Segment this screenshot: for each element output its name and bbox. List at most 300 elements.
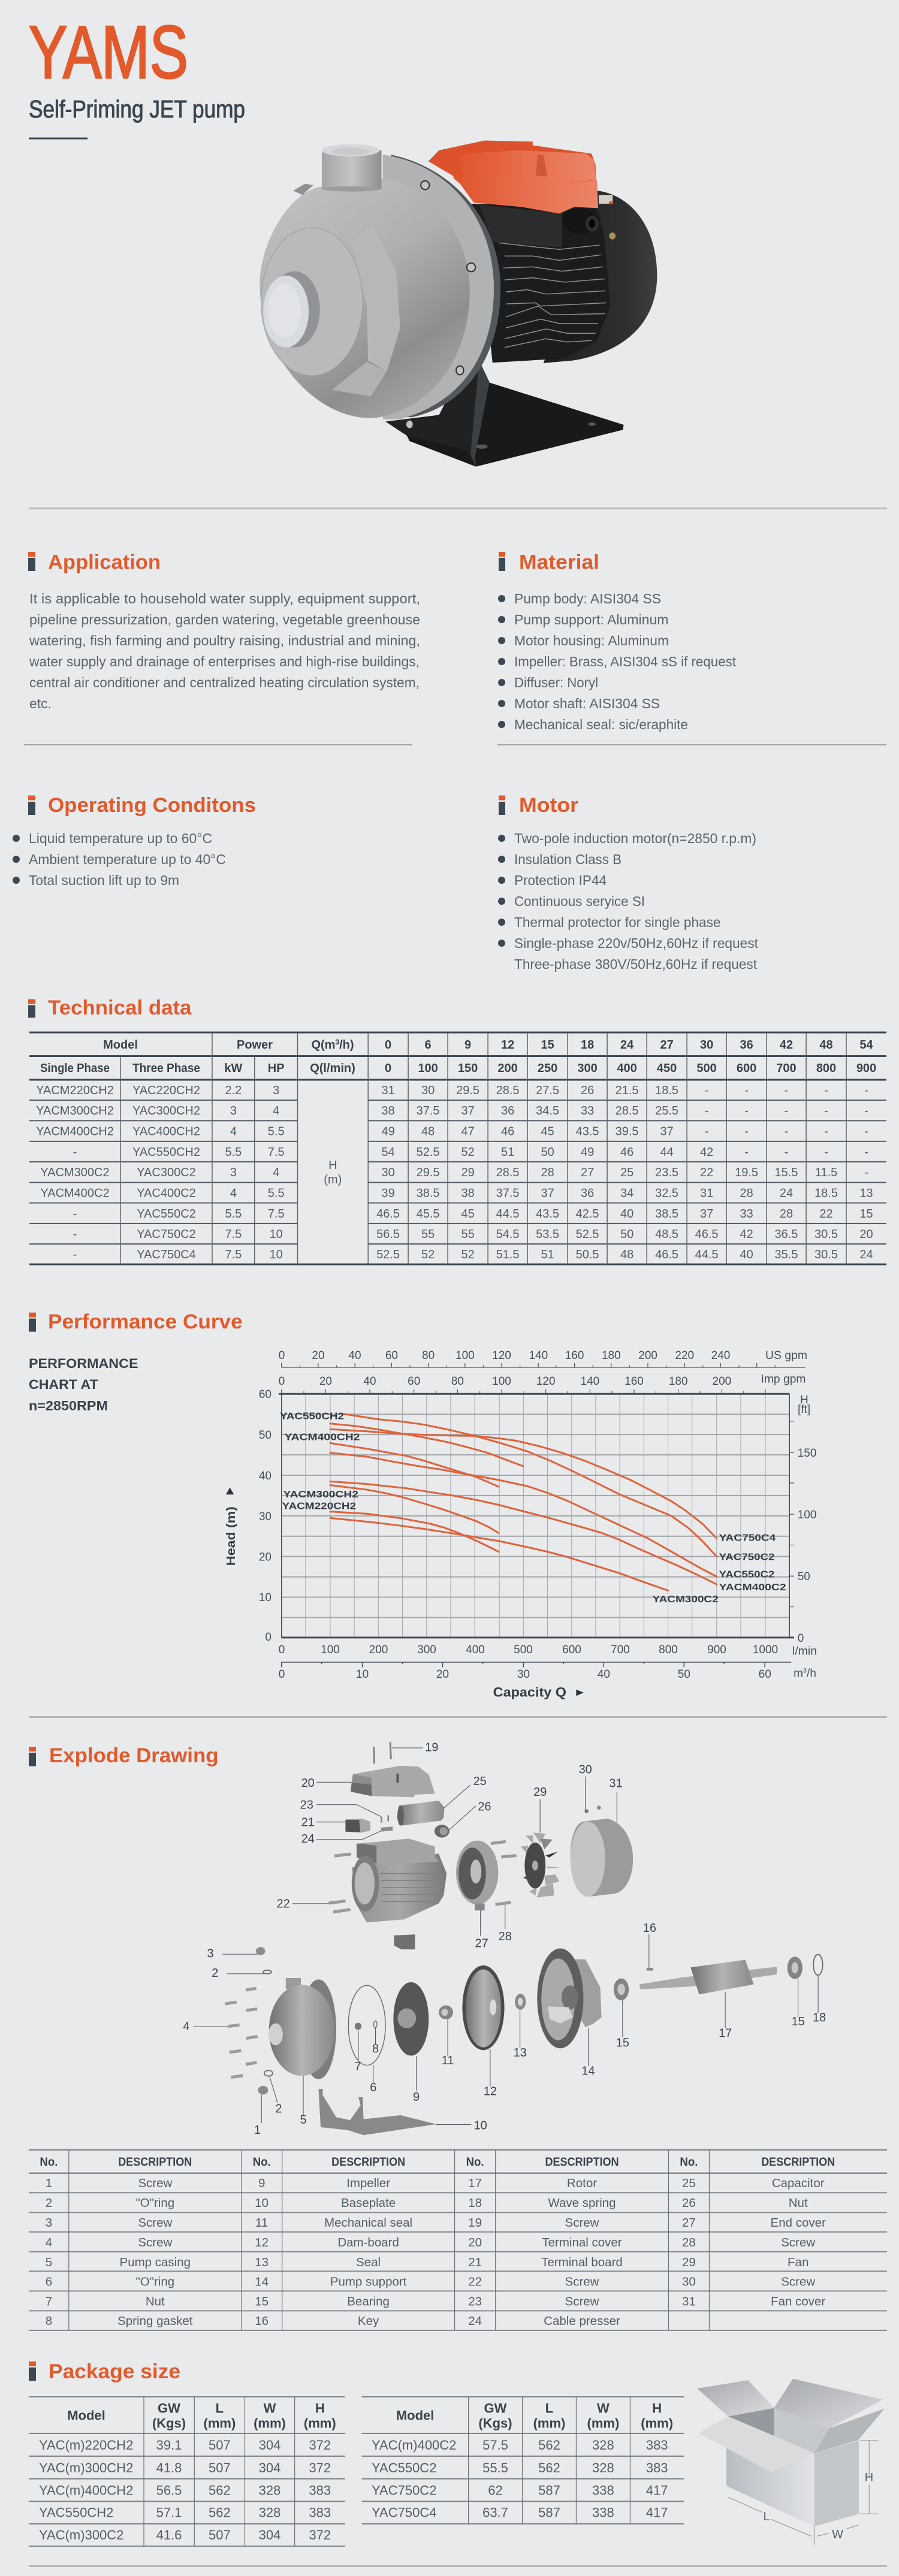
technical data table: YACM220CH2 (36, 1084, 114, 1097)
technical data table: 52 (421, 1248, 435, 1261)
Imp gpm axis labels: 180 (669, 1375, 688, 1388)
technical data table: 52 (461, 1248, 475, 1261)
motor list: Thermal protector for single phase (514, 914, 720, 930)
head axis labels: 0 (265, 1631, 271, 1644)
technical data table: 24 (620, 1038, 634, 1052)
parts table: Screw (781, 2275, 815, 2289)
package table right: L (545, 2401, 553, 2416)
part numbers: 14 (581, 2065, 595, 2078)
parts table: 30 (682, 2275, 696, 2289)
technical data table: 37.5 (417, 1104, 440, 1118)
technical data table: 3 (273, 1084, 279, 1097)
m3/h axis labels: 20 (436, 1668, 449, 1681)
technical data table: 54.5 (496, 1228, 520, 1241)
technical data table: 38 (381, 1104, 395, 1118)
technical data table: 52.5 (576, 1228, 599, 1241)
parts table: 16 (255, 2314, 269, 2328)
technical data table: Model (103, 1038, 138, 1052)
head axis labels (259, 1388, 271, 1644)
head axis labels: 30 (259, 1511, 271, 1523)
technical data table: - (824, 1125, 828, 1138)
part numbers: 17 (719, 2027, 732, 2040)
technical data table: 31 (381, 1084, 395, 1097)
curve labels: YACM300CH2 (283, 1490, 358, 1500)
parts table: Terminal cover (542, 2236, 622, 2249)
Imp gpm axis labels: 100 (492, 1375, 511, 1388)
parts table: 22 (468, 2275, 482, 2289)
technical data table: - (73, 1207, 77, 1221)
housing screws (329, 1841, 517, 1912)
technical data table: 28 (541, 1166, 554, 1179)
chart note: PERFORMANCE (29, 1356, 138, 1371)
package table left: 39.1 (156, 2438, 182, 2453)
parts table: Rotor (567, 2176, 597, 2190)
technical data table: - (73, 1228, 77, 1241)
parts table: 6 (46, 2275, 52, 2289)
technical data table: 800 (816, 1062, 836, 1075)
technical data table: 26 (581, 1084, 594, 1097)
parts table: 9 (258, 2176, 265, 2190)
feet axis labels: 100 (798, 1509, 816, 1521)
technical data table: 5.5 (268, 1125, 285, 1138)
l/min axis labels: 900 (707, 1644, 726, 1656)
part numbers: 29 (533, 1786, 547, 1799)
m3/h axis labels: 30 (517, 1668, 530, 1681)
technical data table: 12 (501, 1038, 514, 1052)
motor list: Three-phase 380V/50Hz,60Hz if request (514, 956, 758, 972)
technical data table: 18.5 (655, 1084, 678, 1097)
section marker (28, 552, 35, 571)
body text: central air conditioner and centralized heating circulation system, (29, 675, 420, 690)
heading: Operating Conditons (48, 794, 256, 817)
technical data table: 30 (700, 1038, 713, 1052)
m3/h axis labels: 40 (598, 1668, 610, 1681)
technical data table: YAC550C2 (137, 1207, 196, 1221)
panel: operating conditions (13, 794, 256, 888)
technical data table: 400 (617, 1062, 637, 1075)
icon: open carton box: H (865, 2471, 873, 2484)
US gpm axis labels: 0 (279, 1349, 285, 1362)
icon: open carton box (697, 2379, 885, 2544)
y axis title: Head (m) (225, 1506, 238, 1566)
technical data table: 9 (464, 1038, 471, 1052)
technical data table: 24 (780, 1186, 793, 1200)
o-ring 2 (263, 1970, 271, 1974)
part numbers: 30 (579, 1763, 592, 1776)
m3/h axis labels: 10 (356, 1668, 369, 1681)
parts table: DESCRIPTION (118, 2156, 192, 2169)
parts table: 23 (468, 2295, 482, 2308)
technical data table: YAC400C2 (137, 1186, 196, 1200)
curve labels: YACM400C2 (719, 1583, 786, 1593)
package table right: 328 (592, 2460, 614, 2475)
technical data table: 50 (541, 1146, 554, 1159)
m3/h axis labels: 50 (678, 1668, 690, 1681)
technical data table: 37 (660, 1125, 674, 1138)
inlet port (269, 271, 320, 348)
technical data table: 4 (230, 1186, 237, 1200)
part numbers (183, 1741, 826, 2137)
technical data table: 0 (385, 1062, 391, 1075)
parts table: 19 (468, 2216, 482, 2230)
mounting bracket (407, 382, 623, 467)
package table right: (mm) (641, 2416, 673, 2431)
m3/h axis labels (279, 1667, 816, 1681)
technical data table: Three Phase (132, 1062, 200, 1075)
leader lines (193, 1748, 818, 2125)
technical data table: 34.5 (536, 1104, 559, 1118)
parts table: 3 (46, 2216, 52, 2230)
technical data table: 52.5 (417, 1146, 440, 1159)
technical data table: HP (268, 1062, 285, 1075)
cable gland (562, 208, 597, 234)
parts table: No. (40, 2156, 58, 2169)
technical data table: 25.5 (655, 1104, 678, 1118)
parts table: Nut (146, 2295, 165, 2308)
package table right: H (652, 2401, 662, 2416)
US gpm axis labels: 240 (711, 1349, 730, 1362)
heading: Package size (49, 2360, 180, 2383)
US gpm axis labels: 220 (675, 1349, 694, 1362)
head axis labels: 60 (259, 1388, 271, 1401)
dam-board (462, 1965, 505, 2050)
technical data table: 28.5 (496, 1084, 520, 1097)
motor list (498, 831, 759, 972)
technical data table: 36 (501, 1104, 514, 1118)
body text (29, 591, 420, 711)
package table left: (mm) (204, 2416, 236, 2431)
section marker (499, 796, 505, 815)
technical data table: 600 (737, 1062, 756, 1075)
parts table: Fan cover (771, 2295, 825, 2308)
technical data table: 18.5 (814, 1186, 838, 1200)
package table right: 587 (538, 2483, 560, 2498)
l/min axis labels: 0 (279, 1644, 285, 1656)
US gpm axis labels: 160 (565, 1349, 584, 1362)
panel: application (28, 551, 420, 711)
technical data table: 11.5 (815, 1166, 837, 1179)
top screws (374, 1742, 391, 1763)
parts table (29, 2149, 887, 2331)
package table left: 56.5 (156, 2483, 182, 2498)
technical data table: 38 (461, 1186, 475, 1200)
technical data table: 46 (620, 1146, 633, 1159)
package table right: W (597, 2401, 610, 2416)
motor body (471, 204, 610, 363)
parts table: DESCRIPTION (761, 2156, 835, 2169)
package table left: 57.1 (156, 2505, 182, 2520)
technical data table: - (705, 1125, 708, 1138)
part numbers: 7 (354, 2060, 361, 2073)
parts table: End cover (771, 2216, 826, 2230)
parts table: Spring gasket (117, 2314, 193, 2328)
material list: Impeller: Brass, AISI304 sS if request (514, 654, 737, 669)
parts table: 5 (46, 2255, 52, 2269)
parts table: Screw (138, 2236, 172, 2249)
technical data table: - (73, 1248, 77, 1261)
heading: Explode Drawing (49, 1744, 218, 1767)
fan cover (571, 1819, 633, 1896)
parts table: 29 (682, 2255, 696, 2269)
technical data table: YACM400CH2 (36, 1125, 114, 1138)
technical data table: 38.5 (655, 1207, 678, 1221)
technical data table: 42 (740, 1228, 753, 1241)
curve labels: YAC550C2 (719, 1570, 775, 1580)
curve labels: YACM220CH2 (282, 1502, 356, 1512)
rotor (639, 1967, 777, 1989)
l/min axis labels: 1000 (753, 1644, 778, 1656)
chart grid and curves (226, 1363, 806, 1696)
motor housing (352, 1853, 447, 1922)
technical data table: - (864, 1084, 868, 1097)
Imp gpm axis labels: 140 (581, 1375, 599, 1388)
technical data table: YACM400C2 (40, 1186, 110, 1200)
panel: technical data (28, 996, 886, 1266)
technical data table: 29 (461, 1166, 475, 1179)
panel: performance curve (29, 1310, 817, 1700)
package table left: 507 (209, 2438, 231, 2453)
package table left: YAC(m)400CH2 (39, 2483, 133, 2498)
package table left: H (315, 2401, 325, 2416)
parts table: Screw (138, 2176, 172, 2190)
US gpm axis labels: 100 (455, 1349, 475, 1362)
technical data table: /h) (339, 1038, 354, 1052)
technical data table: 27.5 (536, 1084, 559, 1097)
technical data table: - (785, 1104, 788, 1118)
part numbers: 2 (275, 2102, 282, 2115)
technical data table: 34 (620, 1186, 633, 1200)
motor list: Two-pole induction motor(n=2850 r.p.m) (514, 831, 756, 846)
technical data table: 38.5 (417, 1186, 440, 1200)
package table left: 328 (259, 2505, 280, 2520)
technical data table: 300 (577, 1062, 598, 1075)
technical data table: 30.5 (814, 1228, 838, 1241)
package table right: YAC(m)400C2 (372, 2438, 456, 2453)
package table right (362, 2396, 684, 2524)
technical data table: 54 (381, 1146, 395, 1159)
technical data table: 48.5 (655, 1228, 678, 1241)
feet axis labels: H (800, 1394, 809, 1406)
US gpm axis labels (279, 1349, 807, 1362)
technical data table: 700 (776, 1062, 797, 1075)
parts table: Pump casing (120, 2255, 191, 2269)
package table right: 383 (646, 2438, 668, 2453)
parts table: Screw (781, 2236, 815, 2249)
parts table: Wave spring (548, 2196, 616, 2210)
technical data table: 51 (501, 1146, 514, 1159)
parts table: 25 (682, 2176, 696, 2190)
technical data table: 48 (819, 1038, 833, 1052)
technical data table: 53.5 (536, 1228, 559, 1241)
technical data table: 4 (230, 1125, 237, 1138)
technical data table: 450 (657, 1062, 677, 1075)
m3/h axis labels: /h (807, 1667, 816, 1680)
technical data table: 10 (270, 1248, 283, 1261)
technical data table: - (824, 1084, 828, 1097)
package table left: (mm) (304, 2416, 336, 2431)
package table left: L (216, 2401, 224, 2416)
body text: etc. (29, 696, 52, 711)
m3/h axis labels: 0 (279, 1668, 285, 1681)
technical data table: 40 (620, 1207, 633, 1221)
technical data table: - (744, 1084, 749, 1097)
conditions list: Liquid temperature up to 60°C (29, 831, 212, 846)
package table left: 41.8 (156, 2460, 182, 2475)
body text: It is applicable to household water supply, equipment support, (29, 591, 420, 606)
technical data table: YAC300C2 (137, 1166, 196, 1179)
technical data table: (m) (324, 1173, 342, 1186)
package table left: 383 (309, 2505, 331, 2520)
technical data table: 36 (740, 1038, 753, 1052)
seal (515, 1994, 526, 2010)
package table left: 562 (209, 2483, 231, 2498)
technical data table: - (705, 1104, 708, 1118)
head axis labels: 10 (259, 1591, 271, 1604)
technical data table: 27 (581, 1166, 594, 1179)
conditions list: Total suction lift up to 9m (29, 872, 179, 888)
technical data table: YAC750C2 (137, 1228, 196, 1241)
parts table: Mechanical seal (324, 2216, 412, 2230)
technical data table: 37 (541, 1186, 554, 1200)
divider (29, 508, 887, 509)
technical data table: - (864, 1125, 868, 1138)
casing flange (391, 155, 500, 417)
wave spring (813, 1955, 823, 1975)
technical data table: 200 (497, 1062, 518, 1075)
technical data table: 54 (859, 1038, 873, 1052)
part numbers: 5 (300, 2113, 307, 2127)
technical data table: 43.5 (536, 1207, 559, 1221)
pump product image (260, 141, 657, 467)
technical data table: 35.5 (775, 1248, 798, 1261)
package table left: (Kgs) (152, 2416, 186, 2431)
part numbers: 31 (609, 1777, 623, 1790)
body text: water supply and drainage of enterprises and high-rise buildings, (29, 654, 420, 669)
technical data table: 25 (620, 1166, 633, 1179)
technical data table: 2.2 (225, 1084, 242, 1097)
package table right: Model (396, 2408, 434, 2423)
part numbers: 12 (484, 2085, 497, 2098)
technical data table: 42 (700, 1146, 713, 1159)
curve labels: YAC550CH2 (280, 1412, 344, 1422)
technical data table: - (785, 1125, 788, 1138)
technical data table: H (328, 1159, 337, 1172)
package table right: (Kgs) (478, 2416, 512, 2431)
technical data table: 48 (421, 1125, 435, 1138)
parts table: 11 (255, 2216, 268, 2230)
technical data table: 15 (541, 1038, 554, 1052)
technical data table: 36 (581, 1186, 594, 1200)
divider (497, 744, 886, 745)
package table right: 62 (488, 2483, 503, 2498)
package table right: (mm) (533, 2416, 565, 2431)
feet axis labels: 0 (798, 1632, 804, 1645)
package table right: 383 (646, 2460, 668, 2475)
technical data table: 7.5 (268, 1207, 285, 1221)
panel: motor (498, 794, 759, 972)
technical data table: 0 (385, 1038, 391, 1052)
technical data table: 22 (819, 1207, 833, 1221)
technical data table: Q(m (311, 1038, 335, 1052)
part numbers: 27 (475, 1937, 488, 1950)
technical data table: 5.5 (225, 1146, 242, 1159)
package table left: W (264, 2401, 276, 2416)
technical data table: 32.5 (655, 1186, 678, 1200)
technical data table: 4 (273, 1166, 279, 1179)
section marker (29, 1747, 36, 1766)
technical data table: 46.5 (376, 1207, 400, 1221)
technical data table: 30 (381, 1166, 395, 1179)
l/min axis labels: l/min (792, 1645, 817, 1657)
parts table: Capacitor (772, 2176, 825, 2190)
package table left: 372 (309, 2527, 331, 2542)
US gpm axis labels: 60 (385, 1349, 398, 1362)
capacitor (397, 1801, 444, 1826)
parts table: 12 (255, 2236, 269, 2249)
technical data table: 43.5 (576, 1125, 599, 1138)
technical data table: 45.5 (417, 1207, 440, 1221)
bracket holes (589, 422, 596, 426)
chart note: n=2850RPM (29, 1399, 108, 1413)
parts table: Fan (788, 2255, 809, 2269)
parts table: DESCRIPTION (331, 2156, 405, 2169)
technical data table: 19.5 (735, 1166, 758, 1179)
technical data table: 21.5 (616, 1084, 639, 1097)
package table right: YAC750C2 (372, 2483, 436, 2498)
heading: Application (48, 551, 161, 574)
US gpm axis labels: 80 (422, 1349, 435, 1362)
technical data table: 49 (381, 1125, 395, 1138)
Imp gpm axis labels (279, 1373, 806, 1388)
parts table: 8 (46, 2314, 52, 2328)
divider (29, 2565, 887, 2567)
package table left: 41.6 (156, 2527, 182, 2542)
package table left: 328 (259, 2483, 280, 2498)
parts table: Screw (565, 2275, 599, 2289)
technical data table: 44.5 (695, 1248, 719, 1261)
motor list: Single-phase 220v/50Hz,60Hz if request (514, 935, 759, 951)
end cover (456, 1841, 498, 1904)
technical data table: kW (224, 1062, 243, 1075)
technical data table: 15 (859, 1207, 873, 1221)
technical data table: 100 (418, 1062, 438, 1075)
small screws (381, 1815, 388, 1823)
technical data table: YAC400CH2 (132, 1125, 200, 1138)
bearing 15 right (788, 1956, 803, 1979)
impeller (393, 1982, 429, 2056)
parts table: 20 (468, 2236, 482, 2249)
technical data table: 42 (780, 1038, 793, 1052)
x axis title: Capacity Q (493, 1685, 566, 1700)
technical data table: 30 (421, 1084, 435, 1097)
parts table: Terminal board (541, 2255, 623, 2269)
technical data table: 28 (740, 1186, 753, 1200)
technical data table: 3 (230, 1166, 237, 1179)
technical data table: - (705, 1084, 708, 1097)
fan cover (544, 191, 657, 363)
technical data table: 56.5 (376, 1228, 400, 1241)
package table left: 372 (309, 2438, 331, 2453)
parts table: "O"ring (135, 2196, 174, 2210)
parts table: DESCRIPTION (545, 2156, 619, 2169)
parts table: 1 (46, 2176, 52, 2190)
pump support (571, 1959, 602, 2027)
head axis labels: 50 (259, 1429, 271, 1442)
package table right: 417 (646, 2505, 668, 2520)
exploded parts: motor group (329, 1742, 633, 1949)
package table right: 562 (538, 2438, 560, 2453)
section marker (29, 1312, 36, 1331)
